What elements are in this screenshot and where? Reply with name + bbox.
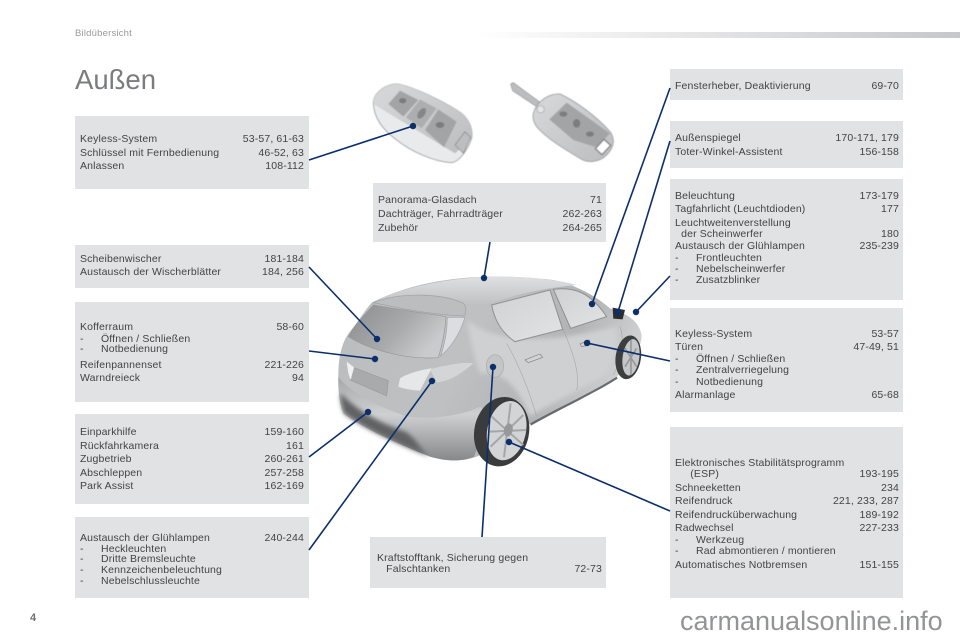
panel: stability and wheels: 189-192 [859, 509, 899, 521]
rear window [348, 305, 446, 358]
panel: wipers: Austausch der Wischerblätter [80, 266, 221, 278]
panel: boot: 58-60 [276, 321, 304, 333]
panel: rear bulbs: - [80, 564, 84, 576]
panel: lighting: 173-179 [859, 190, 899, 202]
panel: parking: Rückfahrkamera [80, 440, 159, 452]
panel: doors: Zentralverriegelung [696, 364, 789, 376]
leader line: rear bulbs [309, 378, 435, 550]
tail light [398, 368, 432, 391]
illustration: smart key fob [373, 84, 472, 163]
panel: panoramic roof [373, 183, 606, 242]
panel: doors: Alarmanlage [675, 389, 736, 401]
panel: boot: - [80, 343, 84, 355]
panel: wipers: Scheibenwischer [80, 253, 161, 265]
panel: fuel tank [370, 537, 606, 588]
panel: parking: Abschleppen [80, 467, 142, 479]
panel: lighting: Leuchtweitenverstellung [675, 217, 791, 229]
section label: Bildübersicht [75, 28, 132, 39]
panel: panoramic roof: 71 [590, 194, 602, 206]
panel: boot: Notbedienung [101, 343, 168, 355]
panel: doors: 47-49, 51 [853, 341, 899, 353]
leader line: fuel tank [482, 364, 496, 537]
panel: lighting [670, 179, 903, 300]
panel: lighting: - [675, 252, 679, 264]
panel: rear bulbs: - [80, 575, 84, 587]
panel: parking: 260-261 [264, 453, 304, 465]
panel: keyless system: 53-57, 61-63 [243, 133, 304, 145]
panel: lighting: der Scheinwerfer [681, 228, 763, 240]
panel: boot [75, 302, 309, 402]
panel: mirrors [670, 121, 903, 168]
panel: fuel tank: 72-73 [574, 563, 602, 575]
panel: parking: 159-160 [264, 426, 304, 438]
shadow under sills [530, 377, 618, 426]
panel: boot: 221-226 [264, 359, 304, 371]
panel: stability and wheels: Automatisches Notbremsen [675, 559, 807, 571]
illustration: car [338, 277, 644, 472]
panel: doors: Öffnen / Schließen [696, 353, 785, 365]
panel: stability and wheels: 234 [881, 482, 899, 494]
panel: mirrors: Außenspiegel [675, 132, 741, 144]
panel: boot: Öffnen / Schließen [101, 333, 190, 345]
panel: stability and wheels: - [675, 534, 679, 546]
rear bumper [338, 377, 490, 460]
panel: windows: Fensterheber, Deaktivierung [675, 80, 811, 92]
leader line: panoramic roof [481, 242, 490, 281]
panel: stability and wheels: Werkzeug [696, 534, 744, 546]
leader line: wheels [506, 439, 670, 511]
panel: parking: 161 [286, 440, 304, 452]
panel: doors: - [675, 353, 679, 365]
panel: doors: - [675, 364, 679, 376]
panel: panoramic roof: 262-263 [562, 208, 602, 220]
panel: windows [670, 69, 903, 100]
panel: keyless system: 108-112 [265, 160, 304, 172]
panel: doors [670, 308, 903, 412]
leader line: boot [309, 351, 378, 362]
lower dark valance [340, 393, 430, 457]
rear wheel [468, 392, 536, 472]
panel: doors: Notbedienung [696, 376, 763, 388]
panel: parking: 162-169 [264, 480, 304, 492]
panel: boot: Reifenpannenset [80, 359, 162, 371]
leader line: lighting [633, 276, 670, 315]
panel: rear bulbs: - [80, 543, 84, 555]
license plate [350, 367, 388, 396]
panel: stability and wheels: - [675, 545, 679, 557]
leader line: doors [584, 340, 670, 361]
panel: stability and wheels: Elektronisches Stabilitätsprogramm [675, 457, 844, 469]
panel: wipers: 181-184 [264, 253, 304, 265]
panel: lighting: 177 [881, 203, 899, 215]
panel: doors: Türen [675, 341, 703, 353]
header gradient bar [475, 32, 960, 38]
fuel flap [486, 355, 504, 377]
panel: boot: - [80, 333, 84, 345]
leader line: wipers [309, 267, 380, 342]
panel: doors: 53-57 [871, 328, 899, 340]
panel: lighting: 235-239 [859, 240, 899, 252]
panel: doors: - [675, 376, 679, 388]
panel: doors: 65-68 [871, 389, 899, 401]
watermark: carmanualsonline.info [680, 606, 943, 636]
panel: rear bulbs: Heckleuchten [101, 543, 166, 555]
illustration: folding key [511, 83, 613, 162]
door handles [525, 354, 543, 363]
panel: parking [75, 414, 309, 504]
panel: parking: 257-258 [264, 467, 304, 479]
panel: rear bulbs: Austausch der Glühlampen [80, 532, 210, 544]
panel: rear bulbs: Kennzeichenbeleuchtung [101, 564, 222, 576]
panel: stability and wheels: Radwechsel [675, 522, 734, 534]
panel: lighting: Zusatzblinker [696, 274, 760, 286]
panel: wipers: 184, 256 [262, 266, 304, 278]
panel: panoramic roof: 264-265 [562, 222, 602, 234]
panel: parking: Park Assist [80, 480, 133, 492]
side panel highlight [467, 320, 618, 417]
panel: fuel tank: Kraftstofftank, Sicherung gegen [377, 552, 528, 564]
panel: parking: Zugbetrieb [80, 453, 132, 465]
panel: lighting: - [675, 274, 679, 286]
panel: parking: Einparkhilfe [80, 426, 137, 438]
panel: keyless system: Anlassen [80, 160, 124, 172]
panel: lighting: Austausch der Glühlampen [675, 240, 805, 252]
panel: mirrors: 170-171, 179 [835, 132, 899, 144]
panel: rear bulbs: - [80, 553, 84, 565]
front wheel [613, 334, 644, 381]
car body [338, 277, 642, 460]
panel: panoramic roof: Dachträger, Fahrradträger [378, 208, 503, 220]
panel: boot: Warndreieck [80, 372, 140, 384]
panel: lighting: Frontleuchten [696, 252, 762, 264]
panel: stability and wheels: 193-195 [859, 468, 899, 480]
panel: boot: 94 [292, 372, 304, 384]
panel: stability and wheels: Schneeketten [675, 482, 741, 494]
panel: fuel tank: Falschtanken [386, 563, 450, 575]
door lines [507, 327, 622, 417]
panel: rear bulbs: Nebelschlussleuchte [101, 575, 200, 587]
panel: windows: 69-70 [871, 80, 899, 92]
leader line: parking [309, 409, 371, 457]
panel: keyless system: Keyless-System [80, 133, 157, 145]
spoiler [373, 295, 466, 316]
panel: stability and wheels: (ESP) [690, 468, 719, 480]
panel: lighting: Tagfahrlicht (Leuchtdioden) [675, 203, 805, 215]
panel: keyless system: Schlüssel mit Fernbedienung [80, 147, 219, 159]
wing mirror [613, 308, 625, 319]
panel: stability and wheels: 221, 233, 287 [833, 495, 899, 507]
panel: stability and wheels: 151-155 [859, 559, 899, 571]
leader line: windows [589, 88, 670, 307]
panel: panoramic roof: Panorama-Glasdach [378, 194, 477, 206]
panel: stability and wheels: Reifendrucküberwachung [675, 509, 797, 521]
panel: mirrors: Toter-Winkel-Assistent [675, 146, 783, 158]
roof [372, 277, 577, 305]
page number: 4 [30, 612, 36, 624]
panel: wipers [75, 245, 309, 288]
leader line: key [309, 123, 416, 160]
panel: stability and wheels: 227-233 [859, 522, 899, 534]
panel: lighting: Beleuchtung [675, 190, 735, 202]
panel: keyless system [75, 116, 309, 189]
panel: mirrors: 156-158 [859, 146, 899, 158]
title: Außen [75, 64, 156, 95]
panel: lighting: Nebelscheinwerfer [696, 263, 785, 275]
panel: boot: Kofferraum [80, 321, 133, 333]
panel: lighting: - [675, 263, 679, 275]
panel: rear bulbs: Dritte Bremsleuchte [101, 553, 196, 565]
panel: stability and wheels [670, 427, 903, 598]
panel: keyless system: 46-52, 63 [258, 147, 304, 159]
panel: panoramic roof: Zubehör [378, 222, 418, 234]
panel: stability and wheels: Rad abmontieren / montieren [696, 545, 836, 557]
panel: rear bulbs: 240-244 [264, 532, 304, 544]
panel: rear bulbs [75, 517, 309, 598]
quarter glass [441, 317, 465, 356]
leader line: mirrors [615, 141, 670, 315]
panel: stability and wheels: Reifendruck [675, 495, 733, 507]
panel: lighting: 180 [881, 228, 899, 240]
panel: doors: Keyless-System [675, 328, 752, 340]
side windows [492, 290, 563, 342]
